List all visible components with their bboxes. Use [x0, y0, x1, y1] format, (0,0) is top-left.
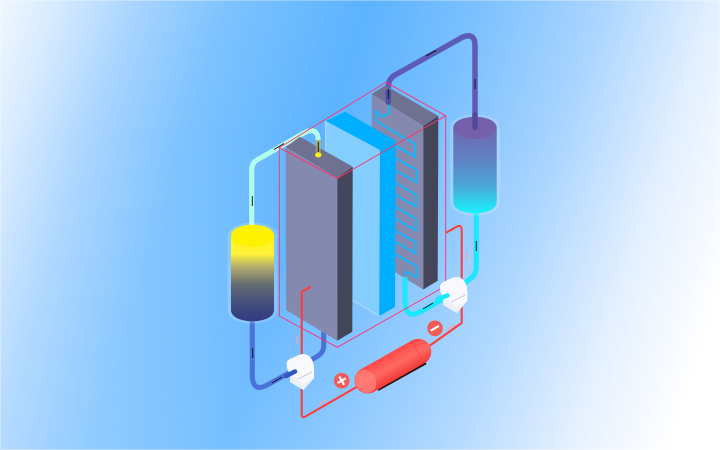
pipe: mint supply pipe: [252, 131, 318, 226]
tank: electrolyte purple cyan: [450, 114, 500, 216]
pipe: mint inlet over left slab: [315, 140, 321, 158]
pump: right: [438, 277, 467, 313]
serpentine flow channel: [376, 105, 417, 278]
flow arrows: [252, 50, 476, 383]
pipe: blue lower pipe right section: [304, 325, 324, 364]
pipe: blue lower pipe left section: [252, 318, 296, 387]
pipe: purple return pipe: [388, 36, 475, 127]
left electrode slab: [286, 137, 353, 341]
membrane: [326, 112, 396, 316]
battery: [350, 334, 436, 398]
badge: minus terminal: −: [425, 317, 445, 341]
wireframe enclosure: [279, 82, 446, 347]
badge: plus terminal: +: [332, 370, 352, 393]
pipe: cyan outlet pipe: [450, 211, 476, 294]
pipe: purple inlet over right slab: [386, 92, 391, 102]
red wire: cathode lead: [425, 226, 462, 349]
pump: left: [286, 354, 314, 390]
current arrows: [297, 252, 467, 404]
red wire: anode lead: [302, 287, 360, 417]
pipe: cyan lower pipe: [405, 277, 450, 314]
right electrode slab: [372, 86, 438, 290]
tank: electrolyte yellow: [228, 222, 278, 324]
